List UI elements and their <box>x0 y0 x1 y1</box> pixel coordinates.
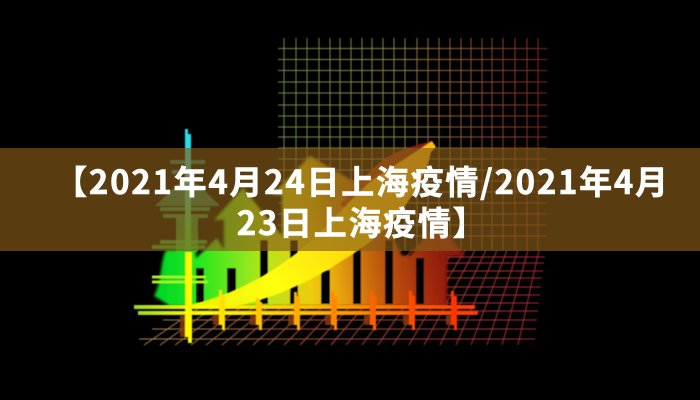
title band <box>0 148 700 251</box>
back wall grid <box>278 38 547 250</box>
base bars <box>134 305 478 315</box>
tower cross bars <box>152 276 208 284</box>
floor grid <box>139 250 545 345</box>
marker pins <box>180 252 457 343</box>
arrow columns <box>154 156 465 306</box>
title: 23日上海疫情】 <box>237 197 487 245</box>
column gaps <box>196 240 424 304</box>
rising swoosh arrow <box>180 141 436 307</box>
title: 【2021年4月24日上海疫情/2021年4月 <box>54 156 670 204</box>
title <box>54 156 670 245</box>
tower <box>152 129 220 252</box>
